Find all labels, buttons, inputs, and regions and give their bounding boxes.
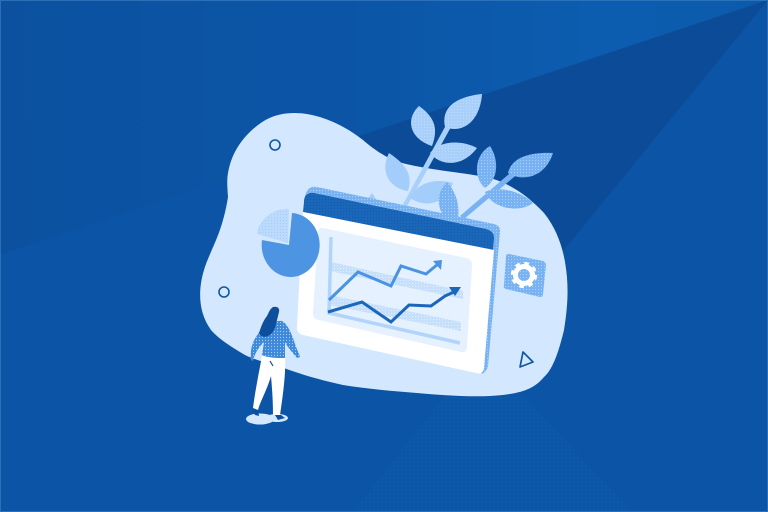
chart bands xyxy=(329,262,463,331)
icon: right plant xyxy=(439,146,553,219)
window header xyxy=(303,193,494,250)
shirt and arms xyxy=(251,321,300,361)
chart panel xyxy=(313,228,472,352)
icon: small circle left xyxy=(219,287,229,297)
person xyxy=(246,307,300,424)
shoes xyxy=(253,410,285,420)
icon: small circle top xyxy=(270,140,280,150)
line: lower trend xyxy=(328,287,461,322)
pocket mark xyxy=(270,361,273,366)
hair and head xyxy=(259,307,279,337)
line: upper trend xyxy=(329,260,442,300)
window body xyxy=(297,212,494,373)
panel: browser window xyxy=(297,187,500,374)
icon: left plant xyxy=(367,94,482,208)
icon: small triangle xyxy=(520,352,533,367)
window side edge xyxy=(305,187,500,374)
icon: gear card xyxy=(504,254,546,297)
pie chart xyxy=(257,209,320,277)
chart axes xyxy=(329,237,460,343)
ground shadow xyxy=(246,414,288,424)
blob backdrop xyxy=(200,113,568,396)
legs xyxy=(253,356,285,415)
